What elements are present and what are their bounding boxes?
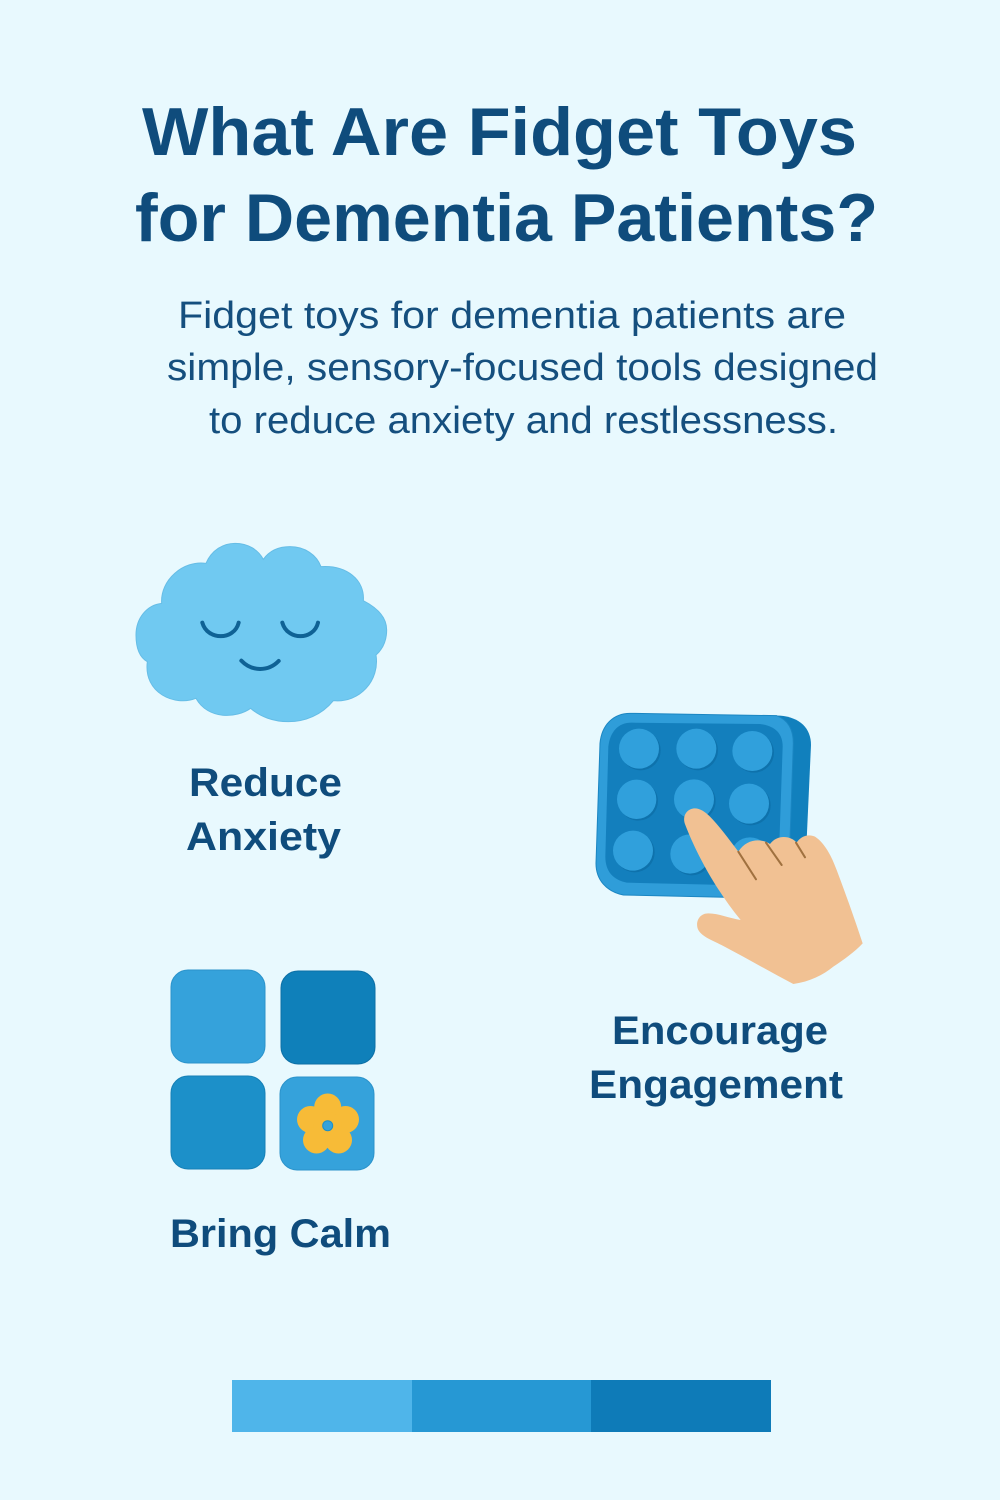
label: reduce anxiety <box>186 761 342 859</box>
title: for Dementia Patients? <box>135 180 878 256</box>
toy side <box>596 713 811 897</box>
toy front rim <box>596 713 793 897</box>
intro text <box>167 295 878 442</box>
label: reduce anxiety: Anxiety <box>186 815 342 859</box>
tile bottom left <box>171 1076 265 1169</box>
flower <box>297 1094 359 1154</box>
toy inner tray <box>605 723 783 885</box>
label: reduce anxiety: Reduce <box>189 761 342 805</box>
intro text: simple, sensory-focused tools designed <box>167 347 878 389</box>
three-colour bar <box>232 1380 771 1432</box>
cloud left eye <box>202 623 239 636</box>
tile top right <box>281 971 375 1064</box>
label: encourage engagement: Encourage <box>612 1009 828 1053</box>
intro text: Fidget toys for dementia patients are <box>178 295 846 337</box>
hand <box>684 808 863 984</box>
title: What Are Fidget Toys <box>142 94 857 170</box>
cloud right eye <box>282 623 318 636</box>
intro text: to reduce anxiety and restlessness. <box>209 400 838 442</box>
tile top left <box>171 970 265 1063</box>
toy button shadows <box>615 730 774 878</box>
title <box>135 94 878 256</box>
icon: smiling cloud <box>136 543 387 722</box>
icon: pop-it toy with pointing hand <box>596 713 863 984</box>
finger creases <box>738 843 805 879</box>
cloud mouth <box>241 661 279 669</box>
label: encourage engagement <box>589 1009 843 1107</box>
label: encourage engagement: Engagement <box>589 1063 843 1107</box>
label: bring calm: Bring Calm <box>170 1212 391 1256</box>
tile bottom right <box>280 1077 374 1170</box>
icon: four tiles with flower <box>171 970 375 1170</box>
toy buttons <box>613 729 772 876</box>
